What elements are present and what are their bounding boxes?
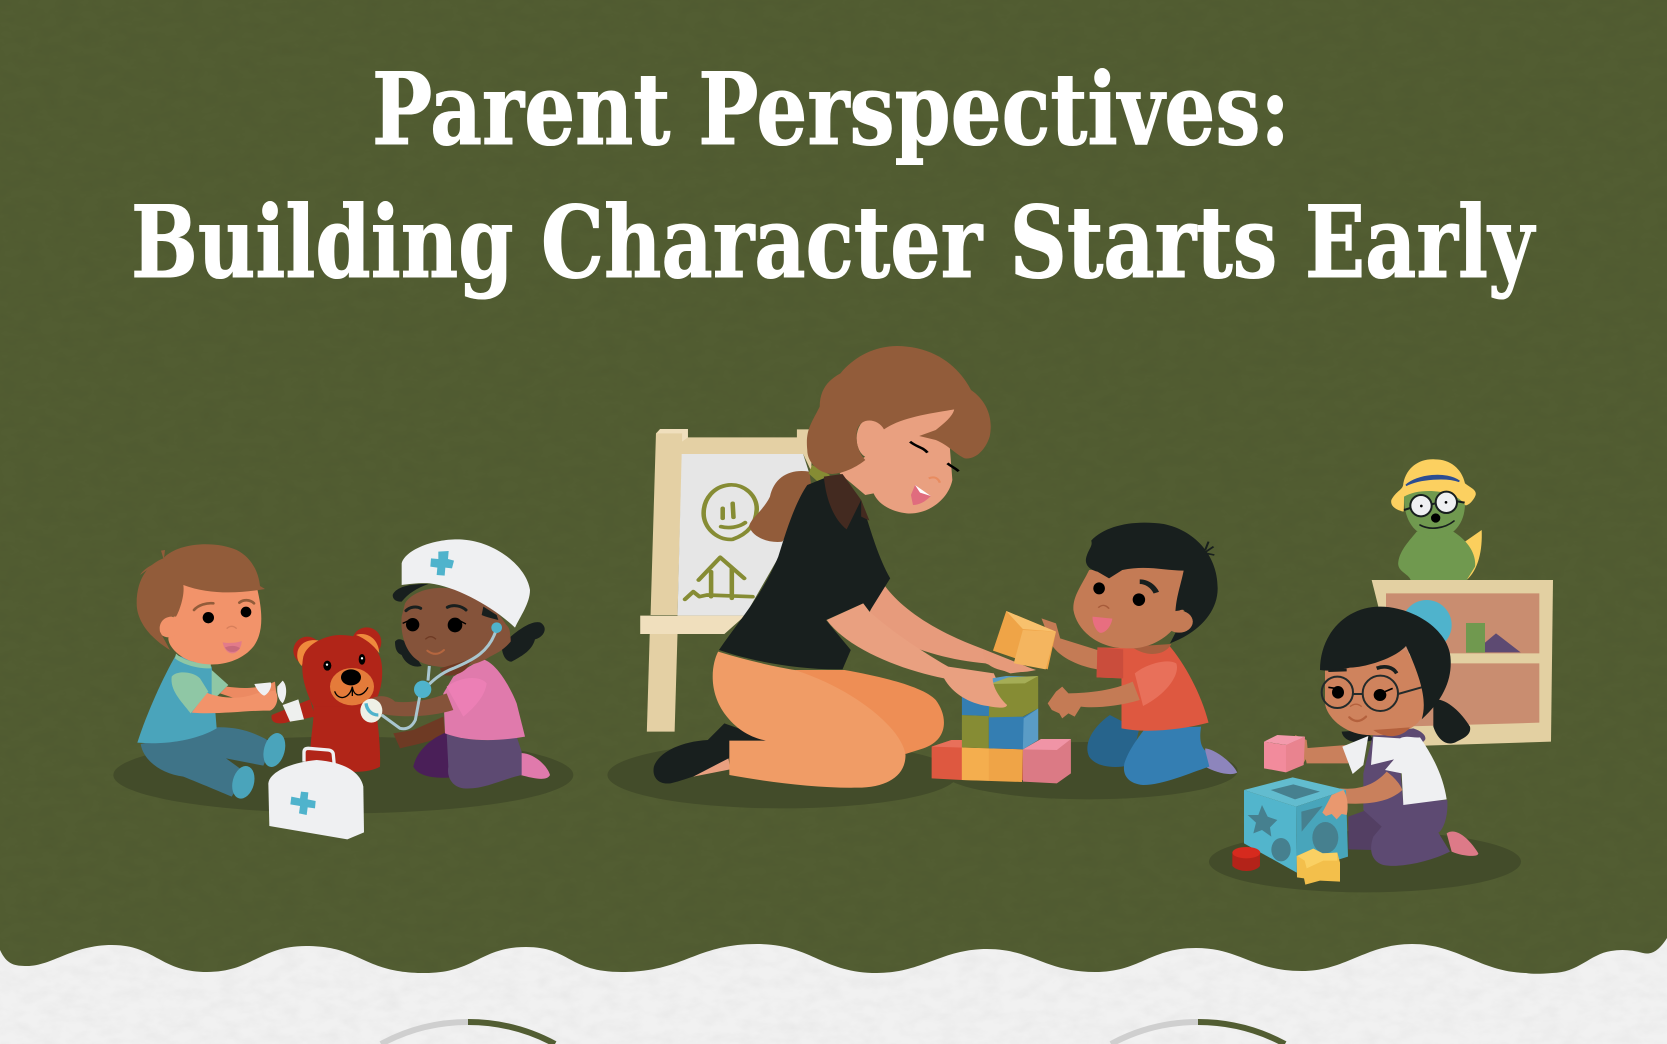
boy with bandage [137, 544, 289, 801]
gauge ring left (partial) [381, 1022, 555, 1044]
scene: boy, teddy bear and girl doctor [113, 539, 573, 839]
green plush toy [1391, 459, 1482, 580]
teacher [653, 346, 1035, 788]
title: Parent Perspectives: [372, 52, 1290, 168]
scene: bookshelf, plush toy and girl with shape sorter [1209, 459, 1553, 892]
scene: teacher, easel, blocks and boy [607, 346, 1238, 808]
girl doctor [360, 539, 550, 789]
boy with red shirt [1048, 523, 1237, 785]
title [131, 52, 1536, 301]
girl's hand on sorter [1322, 790, 1348, 819]
teddy bear [271, 627, 382, 772]
red peg [1232, 847, 1260, 871]
ground shadow [1209, 831, 1521, 892]
girl with glasses [1303, 607, 1478, 866]
block tower [932, 676, 1071, 783]
bookshelf [1372, 580, 1553, 746]
ground shadows [607, 742, 1238, 808]
yellow star block [1297, 849, 1340, 885]
first aid kit [268, 748, 364, 839]
gauge ring right (partial) [1111, 1022, 1285, 1044]
boy's far arm and held block [983, 611, 1097, 672]
pink cube [1264, 735, 1308, 772]
easel with drawings [640, 429, 811, 732]
teacher's hand [944, 673, 1007, 708]
ground shadow [113, 737, 573, 813]
blue shape sorter [1244, 777, 1348, 873]
